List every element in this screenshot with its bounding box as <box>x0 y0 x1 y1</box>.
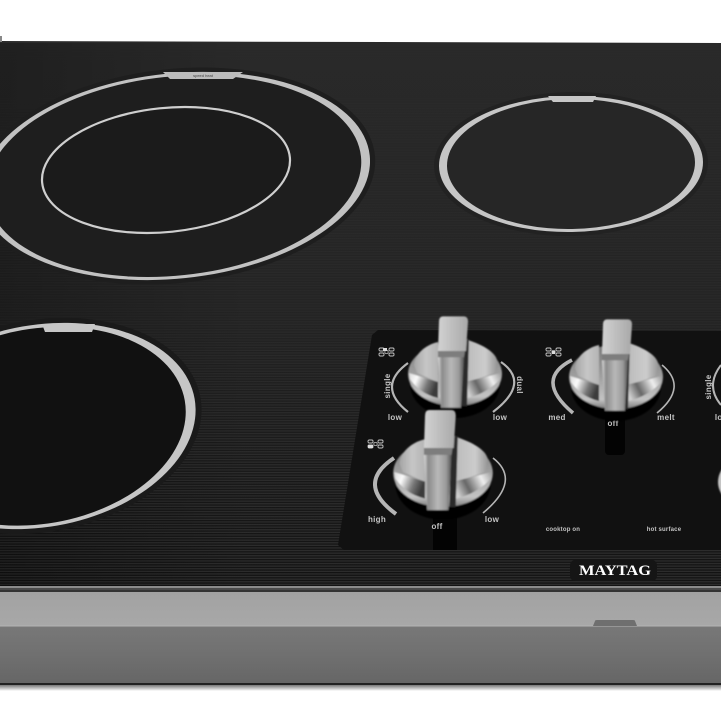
bottom edge <box>0 683 721 685</box>
stainless front panel <box>0 626 721 683</box>
dial labels: med <box>548 413 566 422</box>
speed heat tab <box>163 72 243 79</box>
front trim <box>0 586 721 691</box>
speed heat tab: speed heat <box>193 73 214 78</box>
element selector icons <box>368 348 561 448</box>
dial labels: low <box>388 413 403 422</box>
dial labels: dual <box>515 376 524 394</box>
notch <box>593 620 637 626</box>
knob: melt <box>569 319 663 421</box>
inner ring of large burner <box>36 96 296 244</box>
dial labels: melt <box>657 413 675 422</box>
dial labels <box>368 373 721 533</box>
dial labels: low <box>493 413 508 422</box>
dial labels: low <box>485 515 500 524</box>
knob: dual element <box>408 316 502 418</box>
dial labels: cooktop on <box>546 527 580 533</box>
dial labels: hot surface <box>647 527 682 533</box>
MAYTAG logo: MAYTAG <box>579 563 651 579</box>
knob: front left <box>393 410 493 520</box>
dial labels: off <box>431 522 443 531</box>
dial arcs <box>375 360 721 514</box>
partial knob: right edge <box>718 452 721 512</box>
stainless top band <box>0 592 721 626</box>
dial labels: single <box>704 374 713 399</box>
large dual burner <box>0 49 386 303</box>
cooktop glass surface <box>0 36 721 588</box>
dial labels: off <box>607 419 619 428</box>
control panel <box>338 316 721 550</box>
rear right burner <box>433 90 709 238</box>
dial labels: high <box>368 515 386 524</box>
outer ring of large burner <box>0 49 386 303</box>
knob reflection stems <box>433 400 625 550</box>
MAYTAG logo <box>570 560 657 581</box>
front left burner <box>0 293 219 559</box>
dial labels: single <box>383 373 392 398</box>
